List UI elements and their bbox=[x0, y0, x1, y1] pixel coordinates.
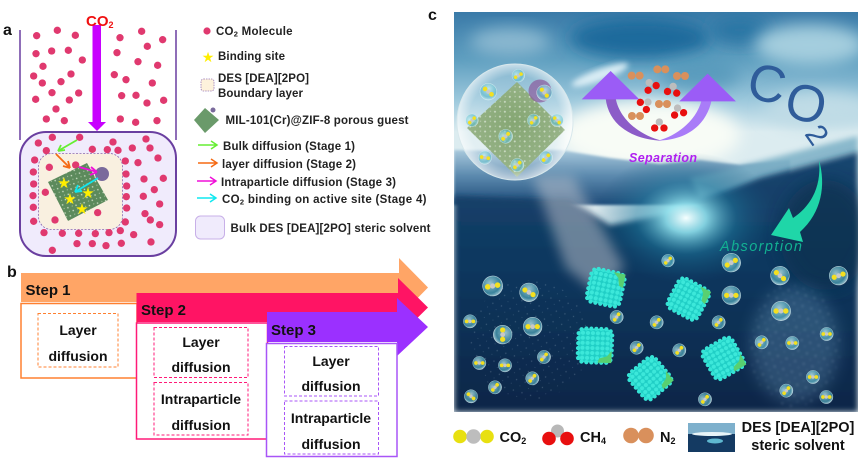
guest pore bbox=[95, 167, 109, 181]
binding site stars: ★ bbox=[57, 175, 71, 192]
legend: N2 model: 2 bbox=[670, 436, 676, 446]
step 2 intraparticle diffusion: Intraparticle bbox=[161, 391, 241, 407]
step 1 heading: Step 1 bbox=[26, 282, 71, 299]
left arrow bbox=[582, 71, 662, 141]
legend: guest bbox=[194, 108, 409, 133]
separation arrows bbox=[582, 65, 736, 141]
legend c bbox=[453, 420, 855, 454]
panel c: scene bbox=[454, 12, 858, 412]
step 1 layer diffusion: Layer bbox=[59, 322, 97, 338]
step 3 layer diffusion: diffusion bbox=[301, 378, 361, 394]
legend: stage 2: layer diffusion (Stage 2) bbox=[222, 159, 356, 171]
panel b: step diagram bbox=[21, 258, 428, 456]
legend: stage 4: binding on active site (Stage 4) bbox=[244, 194, 427, 206]
legend: CH4 model bbox=[542, 424, 606, 446]
legend: CH4 model: CH bbox=[580, 430, 601, 446]
binding site stars: ★ bbox=[81, 185, 95, 202]
step 1 box bbox=[21, 304, 137, 378]
legend a bbox=[194, 26, 431, 239]
absorption arrow bbox=[771, 160, 822, 242]
absorption label: Absorption bbox=[719, 239, 802, 255]
separation label: Separation bbox=[629, 151, 697, 165]
legend: CO2 model: CO bbox=[500, 430, 521, 446]
porous guest particle bbox=[48, 163, 108, 221]
step 1 layer diffusion bbox=[38, 314, 118, 367]
stage arrows bbox=[56, 140, 98, 192]
step 2 heading: Step 2 bbox=[141, 302, 186, 319]
CO2 molecules in solvent bbox=[29, 134, 167, 254]
underwater bbox=[454, 152, 858, 412]
binding site stars bbox=[57, 175, 95, 218]
panel a: beaker diagram bbox=[20, 13, 176, 256]
gas molecules bbox=[628, 65, 689, 132]
CO2 bubbles bbox=[462, 250, 851, 409]
distant waves bbox=[454, 150, 790, 205]
label c: c bbox=[428, 7, 437, 24]
legend: CO2 model bbox=[453, 429, 526, 446]
binding site stars: ★ bbox=[75, 201, 89, 218]
legend: stage 1: Bulk diffusion (Stage 1) bbox=[223, 141, 355, 153]
large CO2 label bbox=[750, 65, 828, 146]
legend: molecule: Molecule bbox=[238, 26, 293, 38]
step 3 intraparticle diffusion: diffusion bbox=[301, 436, 361, 452]
step 3 arrow bbox=[267, 298, 428, 356]
surface highlights bbox=[690, 136, 858, 198]
right arrow bbox=[658, 74, 736, 141]
legend: binding site bbox=[202, 49, 285, 65]
dark right water bbox=[780, 180, 858, 290]
legend: guest: MIL-101(Cr)@ZIF-8 porous guest bbox=[226, 115, 409, 127]
sky clouds bbox=[470, 16, 858, 170]
CO2 inlet label: 2 bbox=[108, 20, 114, 30]
sparkling bubbles haze bbox=[470, 280, 841, 407]
legend: solvent thumbnail bbox=[688, 423, 735, 452]
zoomed guest sphere bbox=[457, 64, 573, 180]
beaker walls bbox=[20, 30, 176, 140]
step 3 box bbox=[266, 344, 397, 456]
large CO2 label: C bbox=[742, 52, 791, 117]
step 2 intraparticle diffusion: diffusion bbox=[171, 417, 231, 433]
legend: solvent label bbox=[742, 420, 855, 454]
sky bbox=[454, 12, 858, 412]
step 1 layer diffusion: diffusion bbox=[48, 348, 108, 364]
CO2 molecules in gas phase bbox=[30, 27, 167, 126]
legend: molecule: CO bbox=[216, 26, 234, 38]
step 2 arrow bbox=[136, 278, 428, 337]
legend: boundary layer: Boundary layer bbox=[218, 88, 304, 100]
legend: stage 4: 2 bbox=[240, 198, 244, 206]
step 2 layer diffusion bbox=[154, 328, 248, 378]
step 3 intraparticle diffusion: Intraparticle bbox=[291, 410, 371, 426]
legend: boundary layer bbox=[201, 73, 309, 100]
legend: molecule: 2 bbox=[234, 30, 238, 38]
large CO2 label: O bbox=[780, 72, 832, 137]
legend: N2 model bbox=[623, 428, 676, 446]
legend: binding site: Binding site bbox=[218, 51, 285, 63]
legend: molecule bbox=[203, 26, 293, 38]
step 2 box bbox=[136, 323, 268, 439]
step 3 heading: Step 3 bbox=[271, 322, 316, 339]
legend: stage 4: CO bbox=[222, 194, 240, 206]
binding site stars: ★ bbox=[63, 191, 77, 208]
light burst bbox=[598, 154, 760, 272]
step 3 layer diffusion: Layer bbox=[312, 353, 350, 369]
label b: b bbox=[7, 264, 17, 281]
light beam bbox=[533, 176, 625, 292]
legend: bulk solvent: Bulk DES [DEA][2PO] steric solvent bbox=[230, 223, 431, 235]
step 3 layer diffusion bbox=[284, 346, 378, 396]
legend: solvent label: DES [DEA][2PO] bbox=[742, 420, 855, 436]
label a: a bbox=[3, 22, 12, 39]
bulk solvent box bbox=[20, 132, 176, 256]
step 2 layer diffusion: diffusion bbox=[171, 359, 231, 375]
boundary layer bbox=[38, 154, 122, 230]
legend: stage 3: Intraparticle diffusion (Stage 3) bbox=[221, 177, 396, 189]
legend: bulk solvent bbox=[196, 216, 431, 239]
legend: solvent label: steric solvent bbox=[751, 438, 845, 454]
legend: CH4 model: 4 bbox=[601, 436, 606, 446]
MOF clusters and CO2 bubbles bbox=[462, 250, 851, 409]
step 2 intraparticle diffusion bbox=[154, 382, 248, 435]
CO2 inlet label: CO bbox=[86, 13, 108, 30]
CO2 inlet arrow bbox=[88, 25, 106, 131]
step 2 layer diffusion: Layer bbox=[182, 334, 220, 350]
step 3 intraparticle diffusion bbox=[284, 401, 378, 454]
legend: CO2 model: 2 bbox=[521, 436, 526, 446]
step 1 arrow bbox=[21, 258, 428, 317]
MOF clusters bbox=[578, 268, 746, 402]
legend: boundary layer: DES [DEA][2PO] bbox=[218, 73, 309, 85]
large CO2 label: 2 bbox=[798, 119, 835, 152]
legend: N2 model: N bbox=[660, 430, 670, 446]
legend: binding site: ★ bbox=[202, 49, 214, 65]
